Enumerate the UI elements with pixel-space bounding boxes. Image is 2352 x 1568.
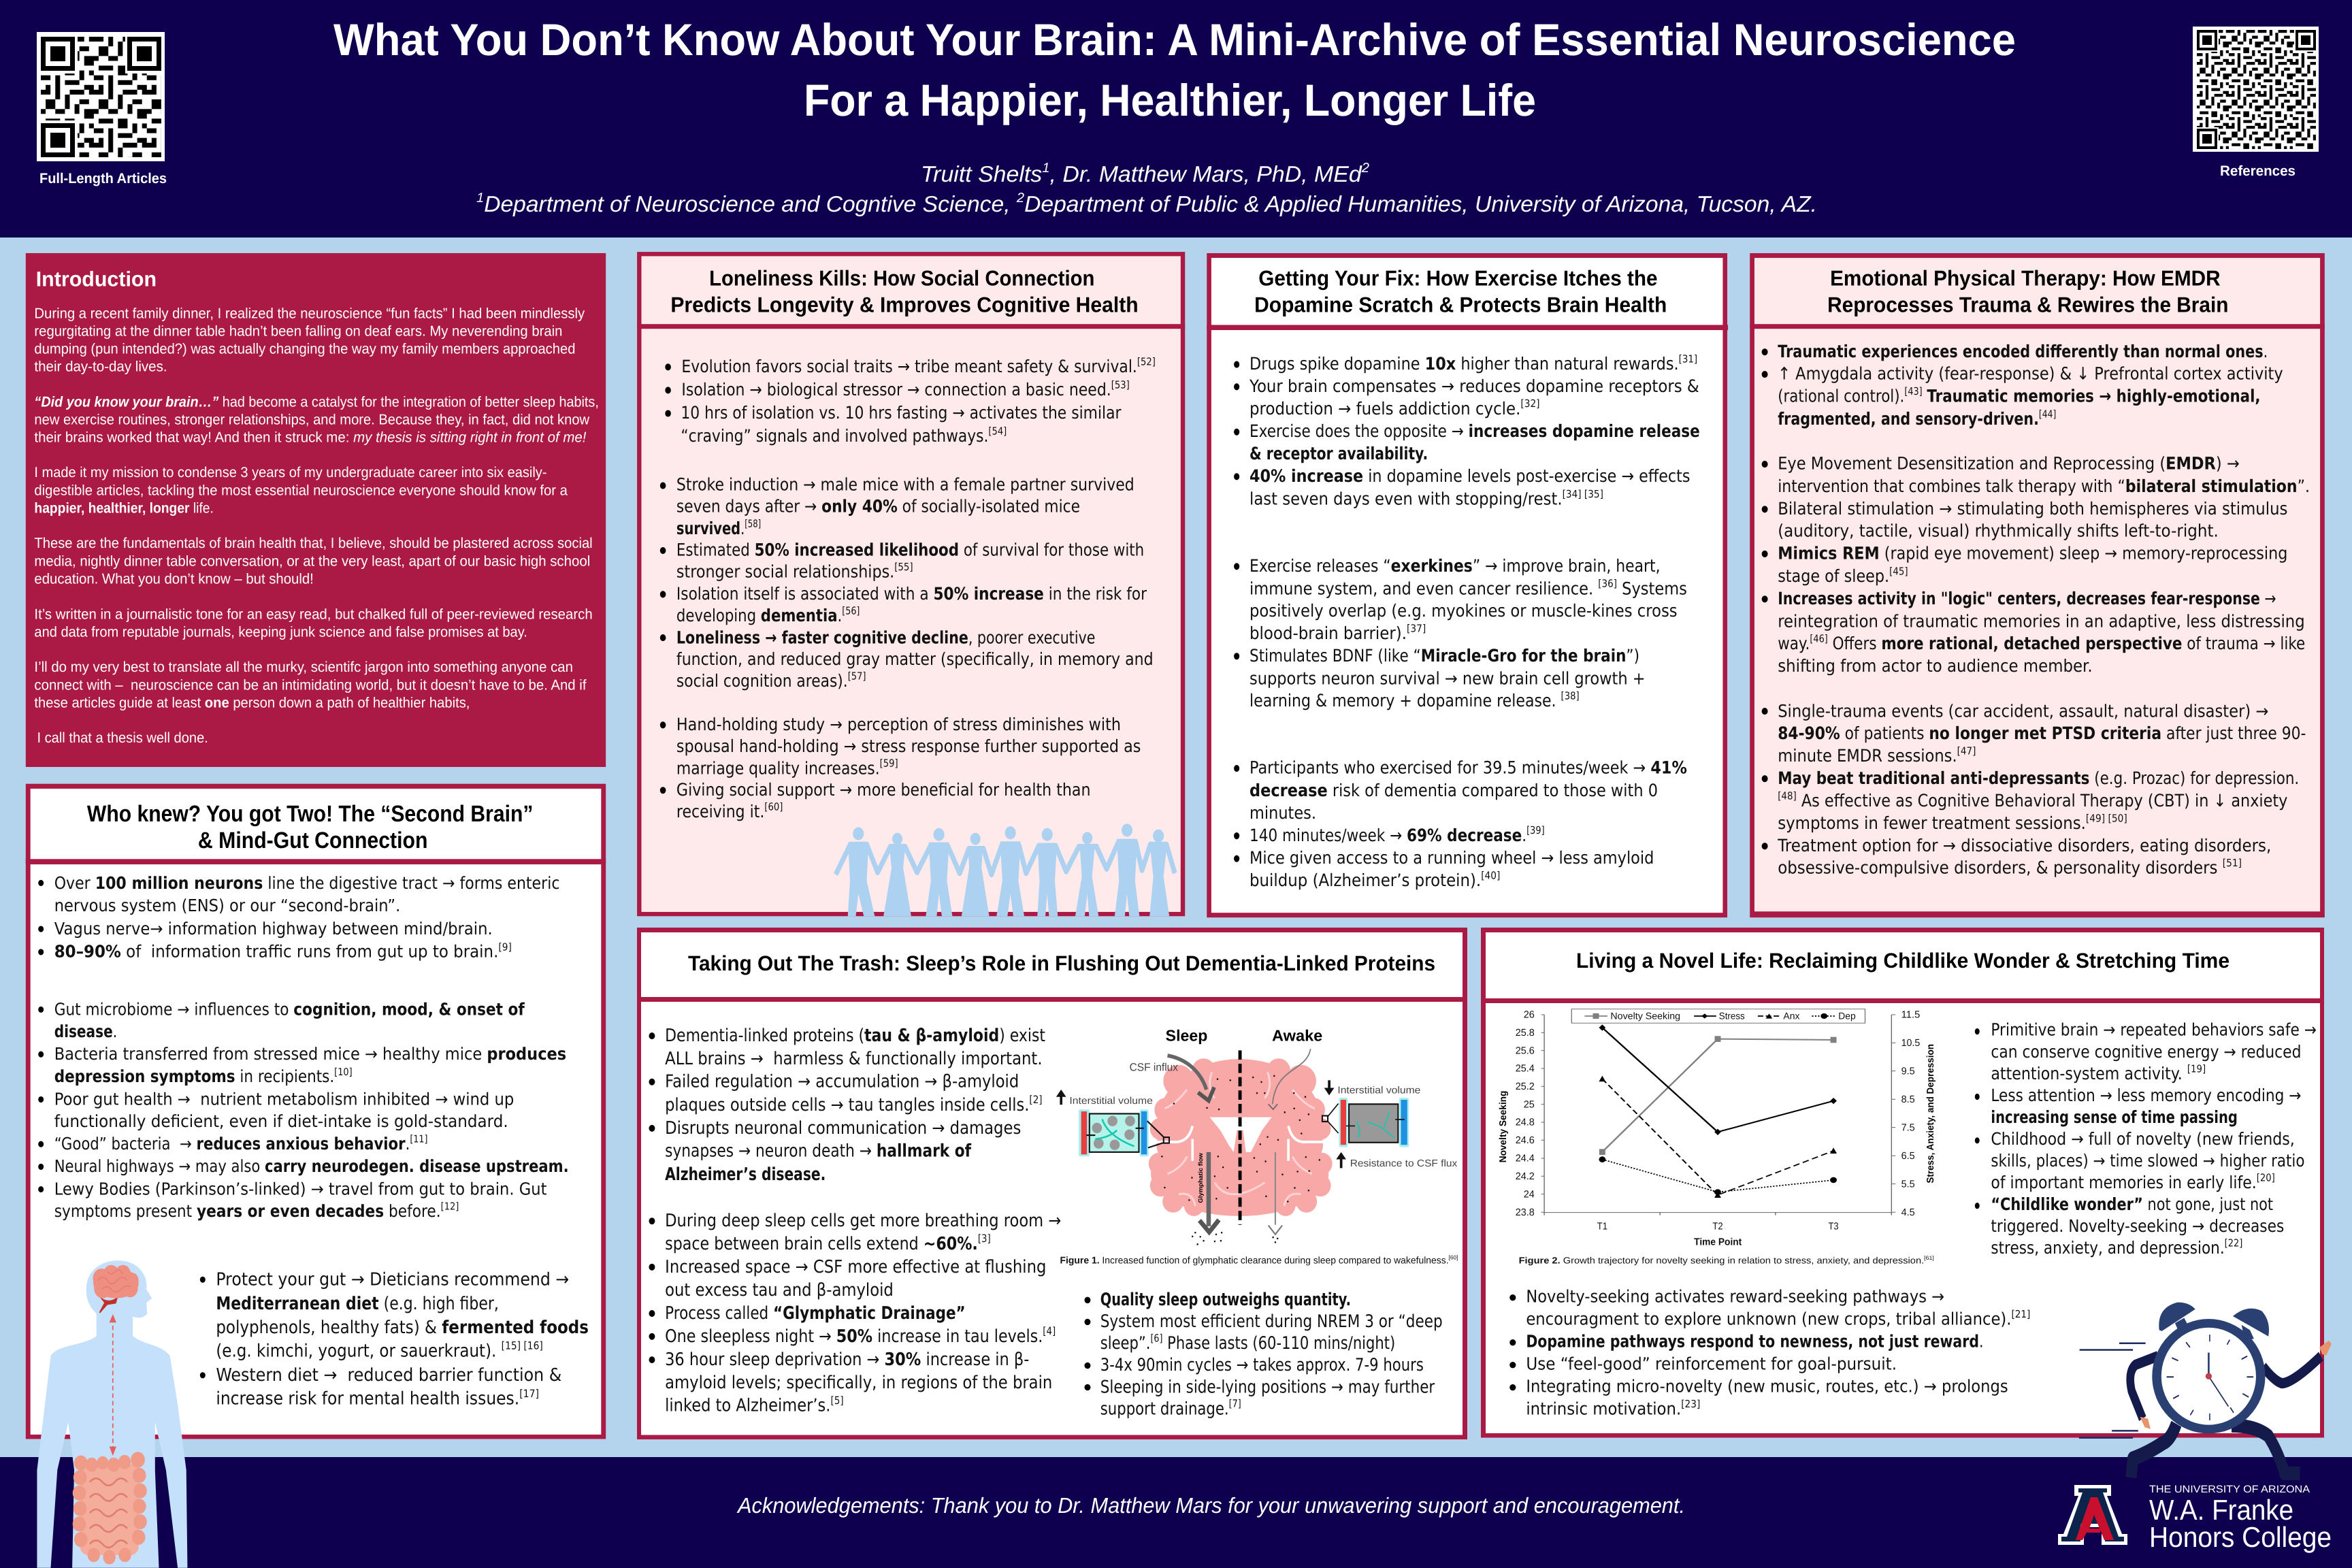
chart legend: Novelty Seeking xyxy=(1610,1011,1680,1022)
text block: protect your gut: Mediterranean diet (e.g. high fiber, xyxy=(216,1293,499,1313)
text block: second brain facts: symptoms present years or even decades before. xyxy=(54,1201,441,1221)
heading: loneliness kills: Loneliness Kills: How Social Connection xyxy=(709,266,1094,290)
text block: sleep facts left column: Increased space → CSF more effective at flushing xyxy=(665,1256,1046,1277)
text block: loneliness facts: [55] xyxy=(894,561,913,573)
text block: novelty right column xyxy=(1975,1020,2317,1258)
left axis tick labels: 26 xyxy=(1524,1009,1535,1020)
text block: introduction body: I’ll do my very best to translate all the murky, scientifc jargon into something anyone can xyxy=(34,659,573,675)
text block: sleep quality: [7] xyxy=(1229,1398,1241,1409)
panel: loneliness kills xyxy=(637,252,1185,916)
series: stress xyxy=(1599,1024,1837,1135)
figure label: interstitial volume awake: Interstitial volume xyxy=(1337,1085,1420,1096)
text block: exercise facts: last seven days even with stopping/rest. xyxy=(1250,489,1531,509)
left axis tick labels: 24.2 xyxy=(1516,1171,1535,1181)
text block: introduction body: I call that a thesis well done. xyxy=(37,730,208,746)
y axis title: novelty seeking: Novelty Seeking xyxy=(1497,1091,1508,1162)
chart legend: Anx xyxy=(1783,1011,1800,1022)
heading: second brain: Who knew? You got Two! The “Second Brain” xyxy=(87,801,533,827)
text block: sleep facts left column: space between brain cells extend ~60%. xyxy=(665,1234,981,1254)
text block: sleep quality xyxy=(1084,1290,1443,1419)
text block: loneliness facts: seven days after → only 40% of socially-isolated mice xyxy=(676,497,1080,517)
text block: novelty right column: Childhood → full of novelty (new friends, xyxy=(1991,1129,2295,1149)
text block: loneliness facts: Isolation → biological stressor → connection a basic need. xyxy=(681,380,1100,399)
chart: figure 1 glymphatic clearance brain diagram xyxy=(1056,1027,1457,1244)
text block: exercise facts: Exercise releases “ exerkines” → improve brain, heart, xyxy=(1250,556,1661,576)
text block: exercise facts: immune system, and even cancer resilience. xyxy=(1250,579,1561,599)
text block: introduction body: their day-to-day lives. xyxy=(34,359,167,375)
text block: novelty right column: stress, anxiety, and depression. xyxy=(1991,1238,2196,1258)
text block: novelty right column: skills, places) → time slowed → higher ratio xyxy=(1991,1151,2304,1171)
text block: protect your gut: [17] xyxy=(519,1387,539,1400)
figure label: interstitial volume sleep: Interstitial volume xyxy=(1069,1095,1153,1106)
left axis tick labels: 25.6 xyxy=(1516,1045,1535,1056)
text block: exercise facts: [36] xyxy=(1598,578,1617,590)
x axis labels: T2 xyxy=(1712,1221,1723,1232)
text block: EMDR facts: Offers xyxy=(1828,634,1881,653)
text block: sleep facts left column: amyloid levels; specifically, in regions of the brain xyxy=(665,1373,1052,1392)
footer band xyxy=(0,1457,2352,1568)
text block: exercise facts: Exercise does the opposite → increases dopamine release xyxy=(1250,422,1700,442)
text block: loneliness facts: marriage quality increases. xyxy=(676,759,875,779)
logo wordmark: W.A. Franke Honors College: THE UNIVERSITY OF ARIZONA xyxy=(2149,1484,2310,1495)
logo wordmark: W.A. Franke Honors College xyxy=(2149,1484,2332,1553)
figure caption: figure 2: Figure 2. Growth trajectory for novelty seeking in relation to stress, anxiety, and depression. xyxy=(1519,1256,2004,1266)
title: For a Happier, Healthier, Longer Life xyxy=(804,75,1536,125)
text block: sleep facts left column: [4] xyxy=(1043,1325,1056,1337)
figure label: Sleep: Sleep xyxy=(1166,1027,1207,1045)
text block: novelty bottom column xyxy=(1509,1286,2030,1418)
text block: protect your gut: Western diet → reduced barrier function & xyxy=(216,1365,561,1386)
right axis tick labels: 5.5 xyxy=(1901,1178,1915,1190)
text block: second brain facts: Bacteria transferred from stressed mice → healthy mice produces xyxy=(54,1044,566,1064)
text block: loneliness facts: Stroke induction → male mice with a female partner survived xyxy=(676,475,1134,495)
authors and affiliations: 1 xyxy=(476,191,484,206)
text block: protect your gut: [15] [16] xyxy=(502,1339,543,1352)
right axis tick labels xyxy=(1901,1009,1920,1218)
text block: introduction body: “Did you know your brain…” had become a catalyst for the integration of better sleep habits, xyxy=(34,393,599,410)
text block: sleep facts left column: Process called “Glymphatic Drainage” xyxy=(665,1303,966,1323)
text block: loneliness facts: social cognition areas). xyxy=(676,671,845,691)
text block: EMDR facts: Traumatic experiences encoded differently than normal ones. xyxy=(1778,342,2268,361)
text block: sleep facts left column xyxy=(649,1026,1061,1416)
figure inset: awake interstitial volume xyxy=(1322,1080,1409,1168)
heading: living a novel life: Living a Novel Life: Reclaiming Childlike Wonder & Stretching Time xyxy=(1576,949,2230,973)
text block: second brain facts: depression symptoms in recipients. xyxy=(54,1066,336,1086)
text block: EMDR facts: [44] xyxy=(2039,408,2056,420)
text block: exercise facts: minutes. xyxy=(1250,803,1316,823)
text block: novelty right column: “Childlike wonder” not gone, just not xyxy=(1991,1194,2273,1214)
text block: sleep facts left column: plaques outside cells → tau tangles inside cells. xyxy=(665,1095,1041,1115)
text block: sleep facts left column: out excess tau and β-amyloid xyxy=(665,1280,894,1301)
figure caption: figure 2: [61] xyxy=(1924,1255,1934,1261)
text block: exercise facts: 40% increase in dopamine levels post-exercise → effects xyxy=(1250,466,1690,486)
text block: second brain facts: [10] xyxy=(334,1066,353,1078)
text block: EMDR facts xyxy=(1762,342,2310,878)
text block: introduction body: and data from reputable journals, keeping junk science and false promises at bay. xyxy=(34,624,527,640)
text block: novelty right column: [22] xyxy=(2225,1237,2242,1249)
text block: EMDR facts: way. xyxy=(1778,634,1812,653)
text block: EMDR facts: [45] xyxy=(1889,566,1908,577)
QR caption: full-length articles: Full-Length Articles xyxy=(39,171,167,186)
text block: loneliness facts: Estimated 50% increased likelihood of survival for those with xyxy=(676,540,1144,560)
text block: sleep facts left column: Failed regulation → accumulation → β-amyloid xyxy=(665,1071,1019,1092)
right axis tick labels: 10.5 xyxy=(1901,1037,1920,1048)
title xyxy=(333,14,2016,125)
text block: loneliness facts xyxy=(660,355,1156,821)
text block: loneliness facts: Isolation itself is associated with a 50% increase in the risk for xyxy=(676,584,1147,604)
left axis tick labels: 25.8 xyxy=(1516,1027,1535,1038)
text block: sleep facts left column: One sleepless night → 50% increase in tau levels. xyxy=(665,1326,1050,1346)
text block: EMDR facts: stage of sleep. xyxy=(1778,566,1890,586)
text block: exercise facts: & receptor availability. xyxy=(1250,444,1428,463)
text block: sleep quality: support drainage. xyxy=(1100,1399,1249,1419)
text block: EMDR facts: minute EMDR sessions. xyxy=(1778,746,1956,766)
text block: loneliness facts: Evolution favors social traits → tribe meant safety & survival. xyxy=(681,357,1128,376)
text block: exercise facts: Participants who exercised for 39.5 minutes/week → 41% xyxy=(1250,758,1687,778)
text block: introduction body xyxy=(34,306,599,746)
text block: sleep facts left column: synapses → neuron death → hallmark of xyxy=(665,1141,972,1161)
text block: novelty bottom column: Novelty-seeking activates reward-seeking pathways → xyxy=(1526,1286,1944,1306)
left axis tick labels xyxy=(1516,1009,1535,1218)
figure label: glymphatic flow: Glymphatic flow xyxy=(1197,1153,1204,1203)
text block: loneliness facts: receiving it. xyxy=(676,802,762,821)
heading: loneliness kills: Predicts Longevity & Improves Cognitive Health xyxy=(670,293,1139,316)
text block: second brain facts: Lewy Bodies (Parkinson’s-linked) → travel from gut to brain. Gut xyxy=(54,1179,547,1198)
text block: second brain facts: disease. xyxy=(54,1022,117,1041)
x axis labels: T3 xyxy=(1828,1221,1839,1232)
x axis labels xyxy=(1597,1221,1839,1247)
text block: exercise facts xyxy=(1234,353,1700,890)
text block: EMDR facts: reintegration of traumatic memories in an adaptive, less distressing xyxy=(1778,612,2305,632)
text block: EMDR facts: [46] xyxy=(1810,633,1828,644)
text block: novelty right column: Primitive brain → repeated behaviors safe → xyxy=(1991,1020,2317,1040)
text block: EMDR facts: Eye Movement Desensitization and Reprocessing (EMDR) → xyxy=(1778,454,2240,474)
text block: loneliness facts: spousal hand-holding → stress response further supported as xyxy=(676,736,1141,756)
text block: sleep facts left column: linked to Alzheimer’s. xyxy=(665,1395,836,1416)
text block: introduction body: dumping (pun intended?) was actually changing the way my family members approached xyxy=(34,341,575,357)
text block: exercise facts: learning & memory + dopamine release. xyxy=(1250,691,1533,710)
text block: second brain facts xyxy=(38,873,569,1221)
figure label: CSF influx: CSF influx xyxy=(1130,1062,1178,1074)
text block: EMDR facts: Mimics REM (rapid eye movement) sleep → memory-reprocessing xyxy=(1778,544,2287,564)
figure label: Awake: Awake xyxy=(1272,1027,1322,1045)
left axis tick labels: 24.4 xyxy=(1516,1153,1535,1164)
text block: sleep facts left column: Disrupts neuronal communication → damages xyxy=(665,1117,1021,1138)
text block: protect your gut xyxy=(200,1269,589,1409)
text block: introduction body: happier, healthier, longer life. xyxy=(34,500,214,516)
text block: novelty bottom column: intrinsic motivation. xyxy=(1526,1399,1818,1418)
text block: second brain facts: [12] xyxy=(441,1201,459,1212)
left axis tick labels: 24.8 xyxy=(1516,1117,1535,1128)
text block: exercise facts: [38] xyxy=(1561,690,1580,702)
text block: exercise facts: decrease risk of dementia compared to those with 0 xyxy=(1250,781,1658,800)
text block: EMDR facts: May beat traditional anti-depressants (e.g. Prozac) for depression. xyxy=(1778,768,2299,788)
text block: novelty right column: of important memories in early life. xyxy=(1991,1173,2220,1192)
series: anxiety xyxy=(1599,1076,1837,1198)
x axis labels: Time Point xyxy=(1694,1236,1742,1247)
right axis tick labels: 11.5 xyxy=(1901,1009,1920,1020)
text block: loneliness facts: [60] xyxy=(764,801,783,813)
right axis tick labels: 8.5 xyxy=(1901,1094,1915,1105)
text block: exercise facts: 140 minutes/week → 69% decrease. xyxy=(1250,826,1526,845)
text block: EMDR facts: [51] xyxy=(2223,857,2242,869)
text block: exercise facts: Stimulates BDNF (like “ Miracle-Gro for the brain ”) xyxy=(1250,646,1639,666)
text block: novelty right column: [20] xyxy=(2257,1172,2275,1183)
text block: loneliness facts: developing dementia. xyxy=(676,606,842,625)
heading: taking out the trash: Taking Out The Trash: Sleep’s Role in Flushing Out Dementia-Linked Proteins xyxy=(688,951,1435,975)
text block: EMDR facts: ↑ Amygdala activity (fear-response) & ↓ Prefrontal cortex activity xyxy=(1778,364,2283,384)
QR code: references xyxy=(2193,27,2319,152)
text block: second brain facts: Neural highways → may also carry neurodegen. disease upstream. xyxy=(54,1156,569,1176)
text block: second brain facts: Poor gut health → nutrient metabolism inhibited → wind up xyxy=(54,1090,514,1109)
text block: loneliness facts: “craving” signals and involved pathways. xyxy=(681,426,983,446)
text block: second brain facts: Gut microbiome → influences to cognition, mood, & onset of xyxy=(54,1000,525,1019)
icon: running alarm clock xyxy=(2079,1303,2332,1477)
text block: exercise facts: Mice given access to a running wheel → less amyloid xyxy=(1250,848,1654,868)
text block: protect your gut: (e.g. kimchi, yogurt, or sauerkraut). xyxy=(216,1341,495,1361)
text block: EMDR facts: fragmented, and sensory-driven. xyxy=(1778,409,2039,429)
text block: introduction body: regurgitating at the dinner table hadn’t been falling on deaf ears. My neverending brain xyxy=(34,323,562,339)
text block: sleep facts left column: [2] xyxy=(1029,1094,1043,1106)
heading: EMDR: Reprocesses Trauma & Rewires the Brain xyxy=(1827,293,2228,316)
text block: EMDR facts: Traumatic memories → highly-emotional, xyxy=(1927,387,2261,406)
text block: loneliness facts: [53] xyxy=(1111,378,1130,391)
text block: sleep quality: System most efficient during NREM 3 or “deep xyxy=(1100,1311,1443,1332)
left axis tick labels: 24 xyxy=(1524,1188,1535,1200)
text block: novelty bottom column: [23] xyxy=(1681,1398,1700,1409)
text block: novelty right column: can conserve cognitive energy → reduced xyxy=(1991,1042,2301,1062)
text block: novelty bottom column: [21] xyxy=(2011,1308,2030,1320)
text block: loneliness facts: stronger social relationships. xyxy=(676,562,887,582)
text block: sleep facts left column: 36 hour sleep deprivation → 30% increase in β- xyxy=(665,1350,1029,1370)
authors and affiliations: Department of Public & Applied Humanities, University of Arizona, Tucson, AZ. xyxy=(1024,191,1817,216)
text block: loneliness facts: Giving social support → more beneficial for health than xyxy=(676,780,1090,800)
right axis tick labels: 6.5 xyxy=(1901,1150,1915,1161)
text block: exercise facts: [31] xyxy=(1679,353,1697,365)
text block: second brain facts: nervous system (ENS) or our “second-brain”. xyxy=(54,896,400,915)
text block: loneliness facts: 10 hrs of isolation vs. 10 hrs fasting → activates the similar xyxy=(681,403,1122,423)
authors and affiliations: Truitt Shelts xyxy=(921,161,1039,186)
panel: getting your fix, exercise xyxy=(1207,253,1728,917)
text block: EMDR facts: symptoms in fewer treatment sessions. xyxy=(1778,813,2080,833)
text block: loneliness facts: function, and reduced gray matter (specifically, in memory and xyxy=(676,649,1154,669)
heading: second brain: & Mind-Gut Connection xyxy=(198,828,427,853)
text block: EMDR facts: Bilateral stimulation → stimulating both hemispheres via stimulus xyxy=(1778,499,2287,519)
text block: EMDR facts: shifting from actor to audience member. xyxy=(1778,656,2093,676)
text block: exercise facts: positively overlap (e.g. myokines or muscle-kines cross xyxy=(1250,601,1678,621)
text block: exercise facts: [37] xyxy=(1407,622,1426,634)
text block: second brain facts: [9] xyxy=(498,941,512,953)
text block: introduction body: digestible articles, tackling the most essential neuroscience everyone should know for a xyxy=(34,483,568,499)
icon: University of Arizona block A logo xyxy=(2058,1485,2127,1545)
text block: sleep facts left column: Dementia-linked proteins (tau & β-amyloid) exist xyxy=(665,1026,1045,1046)
acknowledgements: Acknowledgements: Thank you to Dr. Matthew Mars for your unwavering support and encouragement. xyxy=(736,1493,1685,1518)
text block: introduction body: It’s written in a journalistic tone for an easy read, but chalked full of peer-reviewed research xyxy=(34,606,593,623)
text block: second brain facts: 80–90% of information traffic runs from gut up to brain. xyxy=(54,942,480,962)
text block: loneliness facts: Loneliness → faster cognitive decline, poorer executive xyxy=(676,628,1095,648)
text block: protect your gut: polyphenols, healthy fats) & fermented foods xyxy=(216,1318,589,1337)
text block: second brain facts: Over 100 million neurons line the digestive tract → forms enteric xyxy=(54,873,559,893)
text block: novelty right column: [19] xyxy=(2187,1063,2206,1075)
icon: human silhouette with brain and gut xyxy=(37,1260,187,1568)
authors and affiliations: , Dr. Matthew Mars, PhD, MEd xyxy=(1050,161,1362,186)
text block: exercise facts: [34] [35] xyxy=(1563,488,1603,500)
heading: introduction: Introduction xyxy=(36,267,157,291)
heading: getting your fix: Getting Your Fix: How Exercise Itches the xyxy=(1258,266,1658,290)
icon: people holding hands silhouettes xyxy=(836,823,1175,916)
panel: introduction xyxy=(26,253,606,767)
figure label: resistance to CSF flux: Resistance to CSF flux xyxy=(1350,1158,1457,1169)
panel: living a novel life xyxy=(1481,928,2324,1437)
text block: introduction body: I made it my mission to condense 3 years of my undergraduate career into six easily- xyxy=(34,464,547,480)
panel: second brain and mind-gut connection xyxy=(26,784,606,1568)
logo wordmark: W.A. Franke Honors College: W.A. Franke xyxy=(2149,1494,2293,1526)
text block: sleep facts left column: [3] xyxy=(978,1232,991,1245)
chart legend: Stress xyxy=(1719,1011,1745,1022)
text block: exercise facts: [32] xyxy=(1520,397,1540,410)
text block: sleep quality: Sleeping in side-lying positions → may further xyxy=(1100,1377,1435,1397)
text block: EMDR facts: [43] xyxy=(1904,385,1923,397)
text block: exercise facts: buildup (Alzheimer’s protein). xyxy=(1250,870,1456,890)
x axis labels: T1 xyxy=(1597,1221,1607,1232)
text block: novelty right column: attention-system activity. xyxy=(1991,1064,2155,1083)
text block: loneliness facts: [52] xyxy=(1137,355,1156,368)
left axis tick labels: 25.2 xyxy=(1516,1081,1535,1092)
series: novelty seeking xyxy=(1599,1036,1837,1155)
right axis tick labels: 4.5 xyxy=(1901,1207,1915,1218)
text block: EMDR facts: Increases activity in "logic" centers, decreases fear-response → xyxy=(1778,589,2276,608)
chart: figure 2 novelty seeking line chart xyxy=(1497,1009,1936,1247)
figure inset: sleep interstitial volume xyxy=(1056,1090,1169,1156)
QR caption: references: References xyxy=(2220,163,2296,179)
series: depression xyxy=(1599,1156,1837,1195)
text block: protect your gut: increase risk for mental health issues. xyxy=(216,1388,514,1409)
text block: sleep quality: Quality sleep outweighs quantity. xyxy=(1100,1290,1351,1309)
text block: introduction body: These are the fundamentals of brain health that, I believe, should be plastered across social xyxy=(34,535,593,551)
text block: novelty right column: increasing sense of time passing xyxy=(1991,1107,2238,1127)
right axis tick labels: 7.5 xyxy=(1901,1122,1915,1133)
text block: EMDR facts: obsessive-compulsive disorders, & personality disorders xyxy=(1778,858,2208,878)
authors and affiliations xyxy=(476,161,1817,216)
text block: EMDR facts: more rational, detached perspective of trauma → like xyxy=(1881,634,2311,653)
text block: second brain facts: functionally deficient, even if diet-intake is gold-standard. xyxy=(54,1111,508,1131)
panel: emotional physical therapy, EMDR xyxy=(1750,253,2325,917)
text block: novelty right column: Less attention → less memory encoding → xyxy=(1991,1085,2301,1105)
text block: introduction body: new exercise routines, stronger relationships, and more. Because they, in fact, did not know xyxy=(34,412,590,428)
figure caption: figure 1: Figure 1. Increased function of glymphatic clearance during sleep compared to wakefulness. xyxy=(1060,1255,1437,1266)
text block: EMDR facts: Single-trauma events (car accident, assault, natural disaster) → xyxy=(1778,702,2268,721)
right axis tick labels: 9.5 xyxy=(1901,1065,1915,1077)
left axis tick labels: 25 xyxy=(1524,1098,1535,1110)
text block: EMDR facts: As effective as Cognitive Behavioral Therapy (CBT) in ↓ anxiety xyxy=(1797,791,2287,811)
text block: second brain facts: Vagus nerve→ information highway between mind/brain. xyxy=(54,919,493,938)
logo wordmark: W.A. Franke Honors College: Honors College xyxy=(2149,1521,2332,1553)
text block: novelty bottom column: Use “feel-good” reinforcement for goal-pursuit. xyxy=(1526,1354,1897,1373)
heading: loneliness kills xyxy=(670,266,1139,316)
heading: EMDR: Emotional Physical Therapy: How EMDR xyxy=(1830,266,2221,290)
text block: exercise facts: [39] xyxy=(1526,824,1545,836)
text block: introduction body: connect with – neuroscience can be an intimidating world, but it doesn’t have to be. And if xyxy=(34,677,587,693)
text block: EMDR facts: (rational control). xyxy=(1778,387,1911,406)
text block: sleep facts left column: During deep sleep cells get more breathing room → xyxy=(665,1211,1061,1231)
authors and affiliations: 1 xyxy=(1042,161,1050,176)
text block: sleep facts left column: ALL brains → harmless & functionally important. xyxy=(665,1049,1043,1068)
text block: sleep quality: Phase lasts (60-110 mins/night) xyxy=(1162,1333,1395,1354)
text block: exercise facts: Systems xyxy=(1617,579,1687,599)
chart legend: Dep xyxy=(1838,1011,1856,1022)
heading: getting your fix xyxy=(1254,266,1667,316)
left axis tick labels: 23.8 xyxy=(1516,1207,1535,1218)
authors and affiliations: 2 xyxy=(1361,161,1369,176)
text block: exercise facts: [40] xyxy=(1481,870,1500,881)
text block: exercise facts: production → fuels addiction cycle. xyxy=(1250,399,1491,419)
text block: introduction body: media, nightly dinner table conversation, or at the very least, apart of our basic high school xyxy=(34,553,590,570)
y axis title: stress, anxiety, and depression: Stress, Anxiety, and Depression xyxy=(1925,1044,1936,1183)
text block: loneliness facts: [58] xyxy=(745,517,761,529)
heading: second brain xyxy=(87,801,533,853)
text block: sleep quality: [6] xyxy=(1151,1333,1162,1344)
heading: EMDR xyxy=(1827,266,2228,316)
text block: protect your gut: Protect your gut → Dieticians recommend → xyxy=(216,1269,569,1290)
header band xyxy=(0,0,2352,238)
authors and affiliations: Department of Neuroscience and Cogntive Science, xyxy=(484,191,1017,216)
text block: sleep facts left column: Alzheimer’s disease. xyxy=(665,1164,826,1184)
text block: second brain facts: “Good” bacteria → reduces anxious behavior. xyxy=(54,1134,411,1154)
text block: loneliness facts: survived. xyxy=(676,519,747,538)
QR code: full-length articles xyxy=(37,32,165,161)
text block: exercise facts: Your brain compensates → reduces dopamine receptors & xyxy=(1249,376,1699,396)
text block: introduction body: education. What you don’t know – but should! xyxy=(34,570,314,587)
left axis tick labels: 25.4 xyxy=(1516,1063,1535,1074)
text block: sleep quality: sleep”. xyxy=(1100,1333,1158,1354)
text block: EMDR facts: [48] xyxy=(1778,790,1797,802)
text block: loneliness facts: [56] xyxy=(842,605,860,617)
text block: novelty right column: triggered. Novelty-seeking → decreases xyxy=(1991,1216,2284,1236)
chart legend xyxy=(1571,1009,1865,1023)
text block: EMDR facts: 84-90% of patients no longer met PTSD criteria after just three 90- xyxy=(1778,723,2306,743)
text block: EMDR facts: [47] xyxy=(1957,745,1976,757)
text block: sleep quality: 3-4x 90min cycles → takes approx. 7-9 hours xyxy=(1100,1355,1424,1375)
heading: getting your fix: Dopamine Scratch & Protects Brain Health xyxy=(1254,293,1667,316)
panel: taking out the trash, sleep xyxy=(637,928,1467,1439)
text block: loneliness facts: Hand-holding study → perception of stress diminishes with xyxy=(676,715,1121,734)
text block: introduction body: During a recent family dinner, I realized the neuroscience “fun facts” I had been mindlessly xyxy=(34,306,585,321)
text block: loneliness facts: [57] xyxy=(848,670,866,682)
text block: EMDR facts: [49] [50] xyxy=(2086,813,2127,824)
text block: EMDR facts: Treatment option for → dissociative disorders, eating disorders, xyxy=(1778,836,2271,855)
text block: introduction body: these articles guide at least one person down a path of healthier habits, xyxy=(34,695,470,710)
text block: sleep facts left column: [5] xyxy=(830,1394,844,1407)
text block: introduction body: their brains worked that way! And then it struck me: my thesis is sitting right in front of me! xyxy=(34,429,587,445)
text block: exercise facts: blood-brain barrier). xyxy=(1250,623,1390,643)
text block: EMDR facts: (auditory, tactile, visual) rhythmically shifts left-to-right. xyxy=(1778,521,2219,541)
left axis tick labels: 24.6 xyxy=(1516,1134,1535,1145)
text block: EMDR facts: intervention that combines talk therapy with “bilateral stimulation”. xyxy=(1778,476,2310,496)
text block: second brain facts: [11] xyxy=(410,1134,427,1145)
title: What You Don’t Know About Your Brain: A Mini-Archive of Essential Neuroscience xyxy=(333,14,2016,65)
authors and affiliations: 2 xyxy=(1016,191,1024,206)
text block: exercise facts: supports neuron survival → new brain cell growth + xyxy=(1250,669,1646,689)
figure caption: figure 1: [60] xyxy=(1449,1254,1458,1261)
text block: exercise facts: Drugs spike dopamine 10x higher than natural rewards. xyxy=(1250,354,1659,374)
text block: loneliness facts: [59] xyxy=(880,757,898,769)
text block: loneliness facts: [54] xyxy=(988,425,1007,437)
